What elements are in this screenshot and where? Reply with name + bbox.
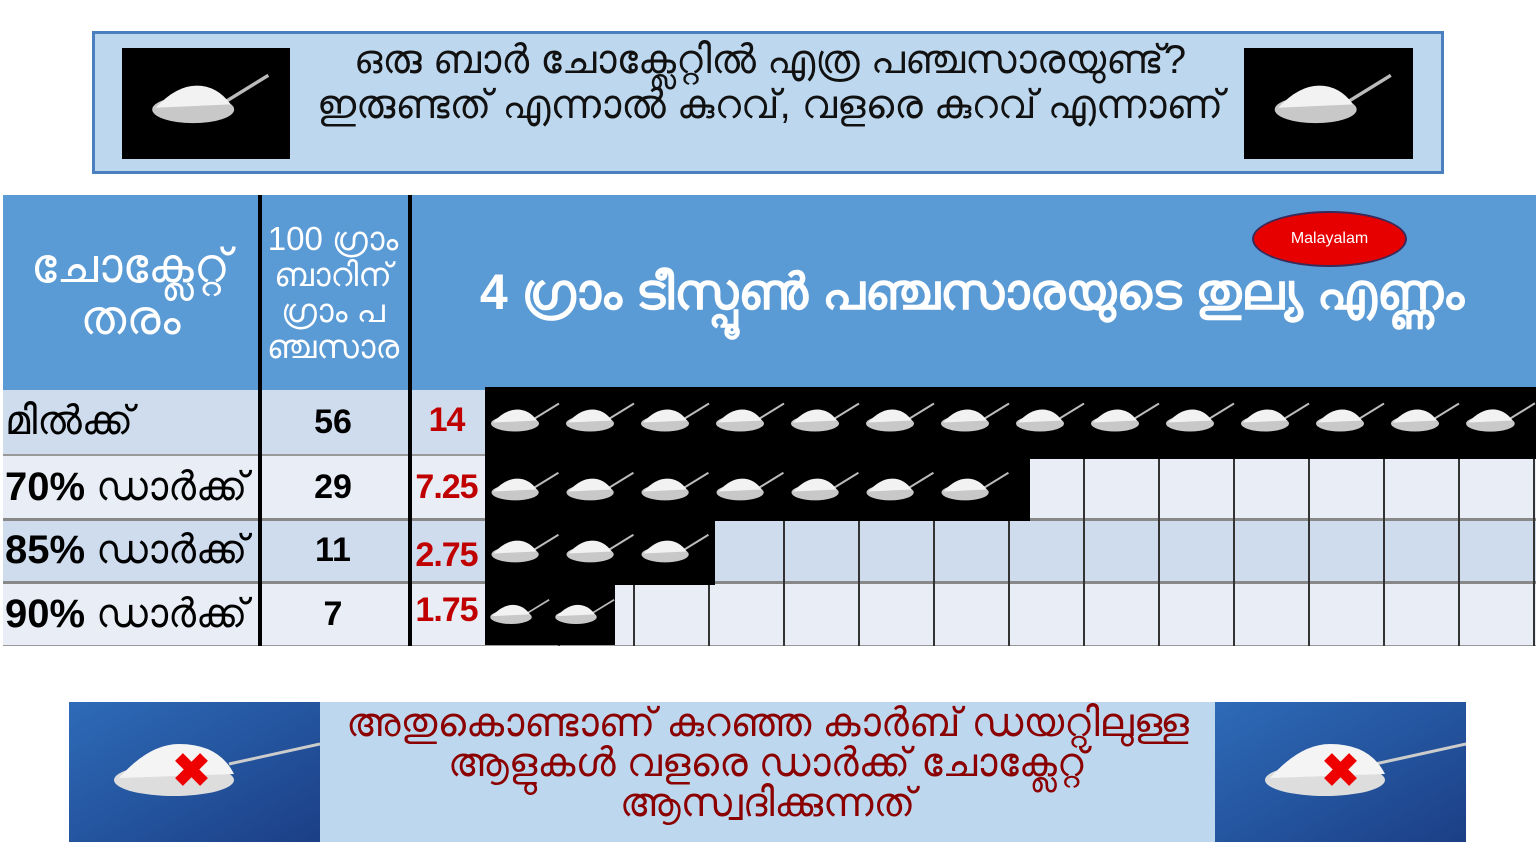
conclusion text: ആസ്വദിക്കുന്നത് <box>620 781 915 825</box>
teaspoon counts <box>415 401 478 629</box>
header: chocolate type: ചോക്ലേറ്റ് <box>31 240 230 292</box>
header: chocolate type <box>3 195 258 390</box>
conclusion text <box>346 701 1189 825</box>
header: teaspoons: 4 ഗ്രാം ടീസ്പൂൺ പഞ്ചസാരയുടെ തുല്യ എണ്ണം <box>480 264 1464 320</box>
header: teaspoons <box>408 195 1536 390</box>
vertical dividers <box>258 195 262 646</box>
teaspoon counts: 1.75 <box>415 591 478 629</box>
sugar grams column <box>314 403 352 633</box>
icon: crossed spoon right <box>1215 702 1466 842</box>
sugar grams column: 7 <box>324 595 342 633</box>
spoon icons grid <box>485 387 1536 645</box>
title banner <box>92 31 1444 174</box>
icon: spoon photo right <box>1244 48 1413 159</box>
sugar grams column: 56 <box>314 403 352 441</box>
row labels: 90% ഡാർക്ക് <box>5 592 247 636</box>
header: chocolate type: തരം <box>80 292 181 344</box>
title text: ഒരു ബാർ ചോക്ലേറ്റിൽ എത്ര പഞ്ചസാരയുണ്ട്? <box>354 38 1186 82</box>
teaspoon counts: 14 <box>429 401 464 439</box>
sugar grams column: 11 <box>315 531 351 569</box>
sugar grams column: 29 <box>314 468 352 506</box>
row labels: 70% ഡാർക്ക് <box>5 465 247 509</box>
row labels <box>5 399 252 636</box>
conclusion text: ആളുകൾ വളരെ ഡാർക്ക് ചോക്ലേറ്റ് <box>448 741 1087 785</box>
header: grams sugar: 100 ഗ്രാം ബാറിന് ഗ്രാം പഞ്ചസാര <box>267 220 399 364</box>
badge: Malayalam: Malayalam <box>1291 230 1368 247</box>
row labels: 85% ഡാർക്ക് <box>5 528 247 572</box>
teaspoon counts: 7.25 <box>415 468 478 506</box>
header: grams sugar <box>258 195 408 390</box>
title text <box>317 38 1228 127</box>
bottom conclusion panel <box>69 702 1466 842</box>
badge: Malayalam <box>1252 211 1407 267</box>
table <box>3 195 1536 646</box>
icon: crossed spoon left <box>69 702 320 842</box>
title text: ഇരുണ്ടത് എന്നാൽ കുറവ്, വളരെ കുറവ് എന്നാണ് <box>317 83 1223 127</box>
teaspoon counts: 2.75 <box>415 536 478 574</box>
rows <box>3 390 1536 646</box>
icon: spoon photo left <box>122 48 290 159</box>
conclusion text: അതുകൊണ്ടാണ് കുറഞ്ഞ കാർബ് ഡയറ്റിലുള്ള <box>346 701 1189 745</box>
row labels: മിൽക്ക് <box>5 399 133 443</box>
